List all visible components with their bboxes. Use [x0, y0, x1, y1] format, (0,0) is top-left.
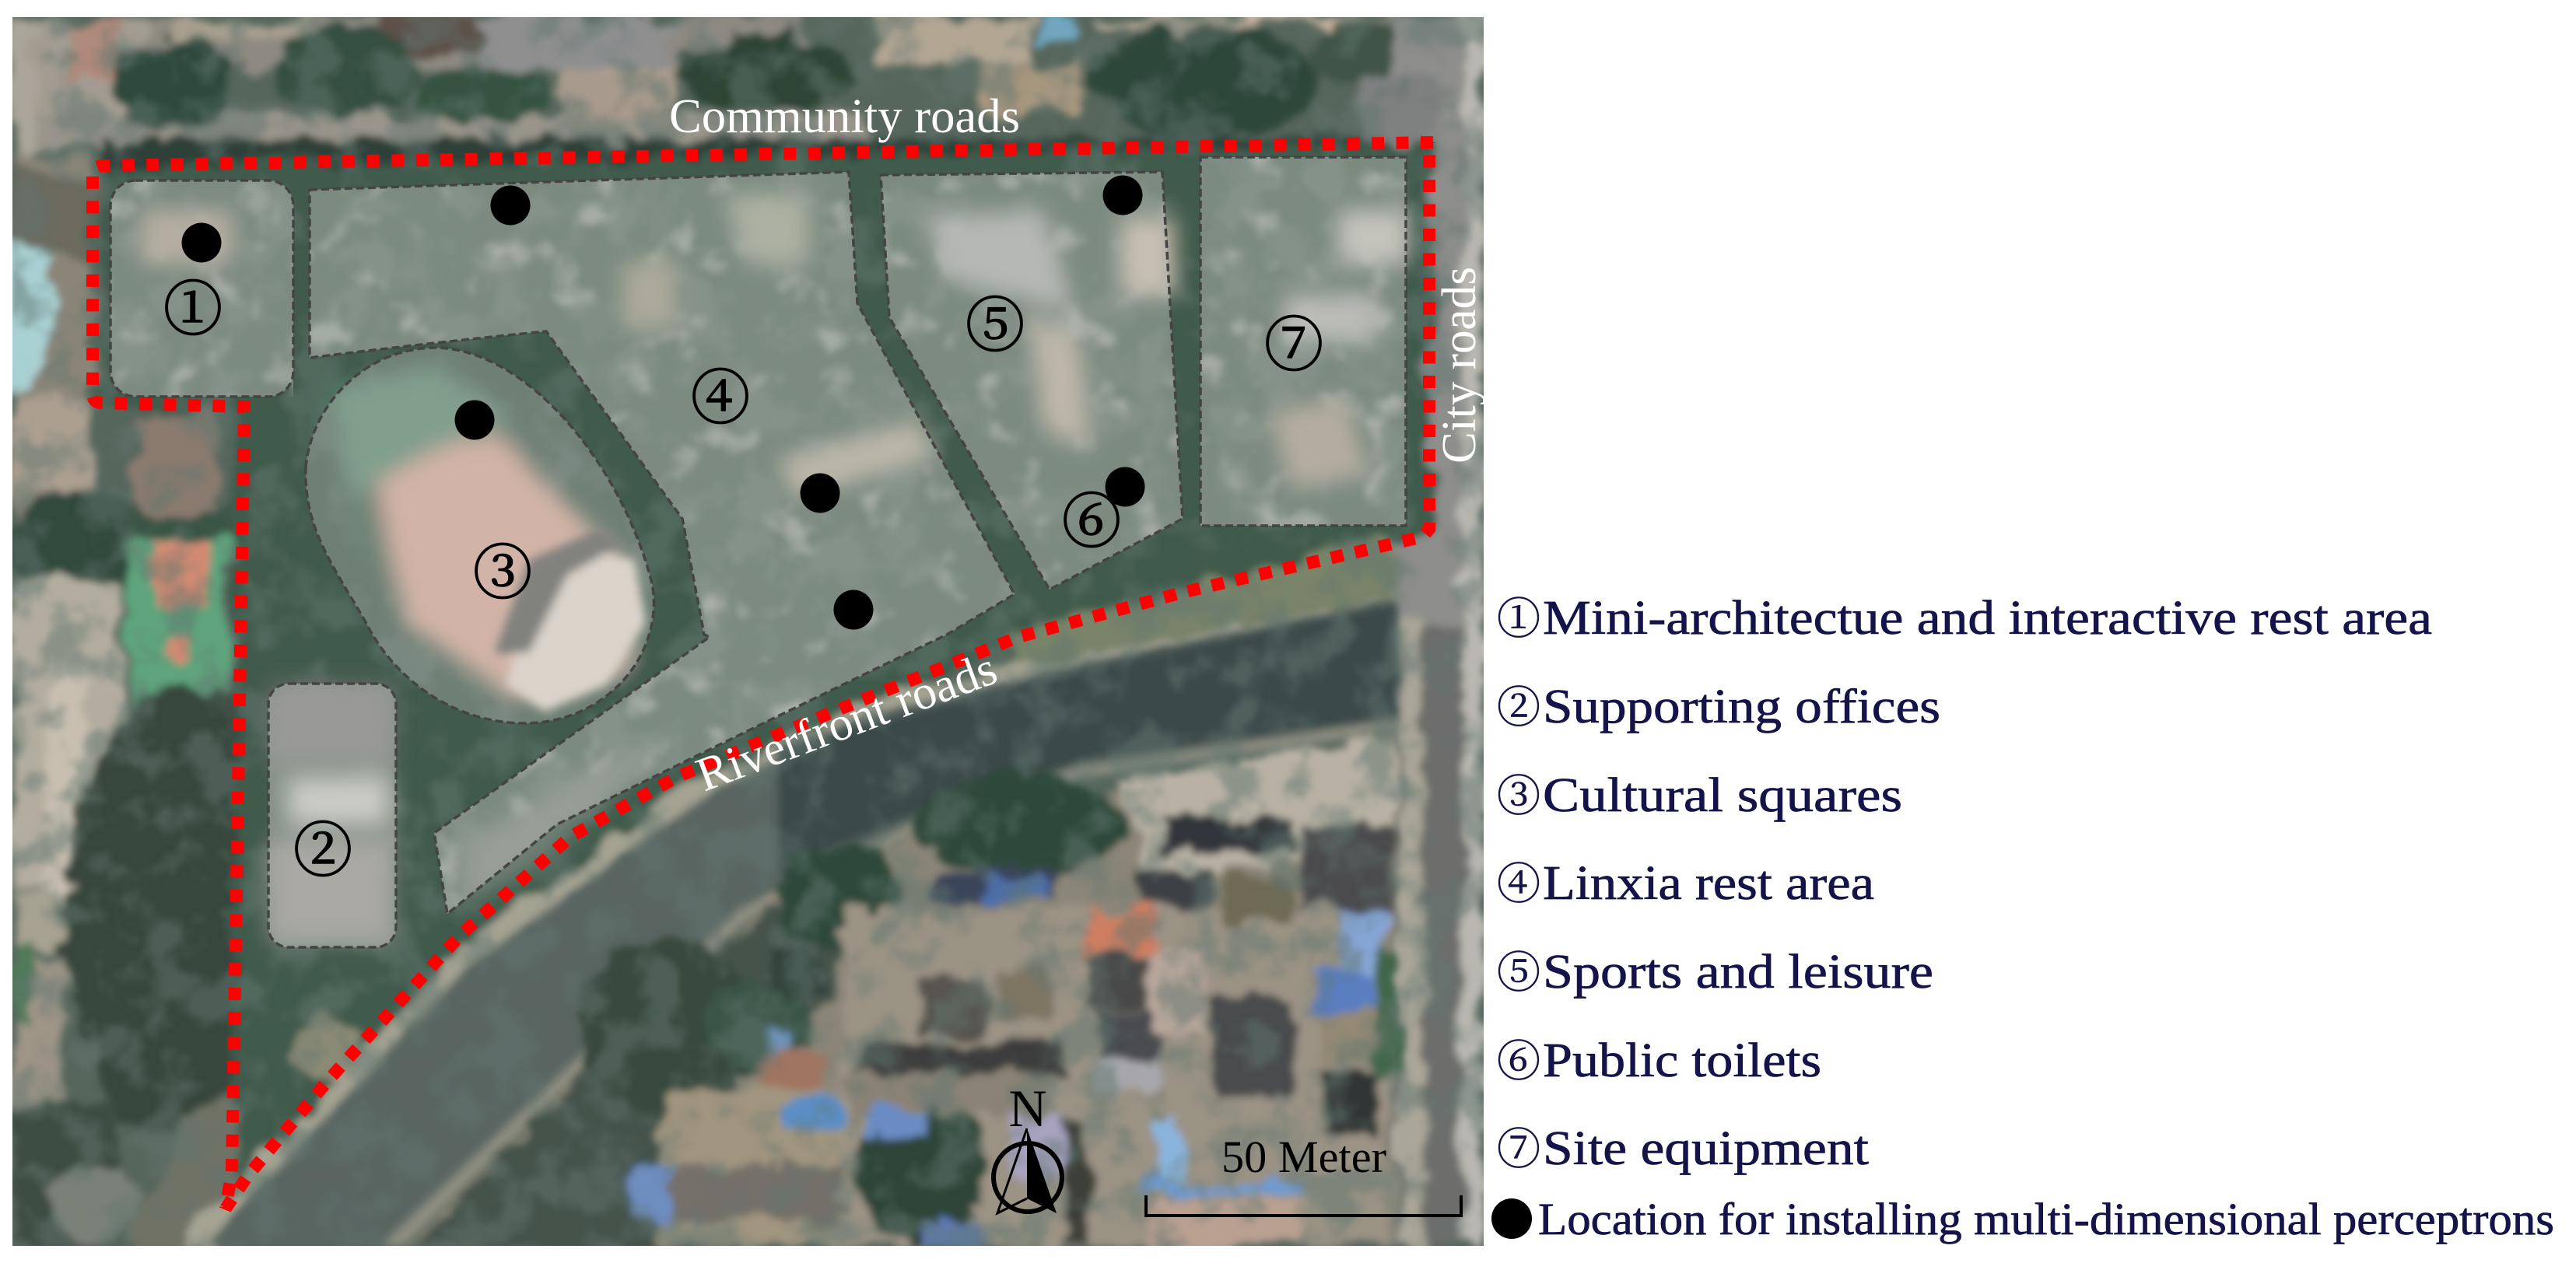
zone numbers — [163, 262, 1323, 888]
legend: ② — [1497, 673, 1540, 736]
road labels: Community roads — [669, 90, 1020, 143]
legend: ⑦ — [1497, 1115, 1540, 1177]
legend: Site equipment — [1543, 1122, 1869, 1175]
site zones — [110, 157, 1406, 947]
road labels — [669, 90, 1486, 802]
legend: Linxia rest area — [1543, 857, 1874, 910]
zone numbers: ⑦ — [1264, 298, 1323, 383]
river — [206, 599, 1397, 1246]
zone light mottling — [110, 157, 1406, 914]
legend: ① — [1497, 585, 1540, 647]
legend: Sports and leisure — [1543, 946, 1933, 999]
south bank — [405, 731, 1398, 1246]
tree canopy mottling — [12, 17, 1484, 1246]
north arrow — [994, 1079, 1062, 1213]
legend: Public toilets — [1543, 1034, 1821, 1087]
north arrow: N — [1008, 1079, 1047, 1138]
zone 5 and 6 — [881, 172, 1183, 590]
legend: Supporting offices — [1543, 680, 1940, 733]
zone 2 — [268, 684, 396, 947]
zone numbers: ⑤ — [966, 278, 1025, 363]
road labels: Riverfront roads — [689, 642, 1004, 802]
zone 1 — [110, 180, 293, 397]
zone numbers: ② — [293, 803, 352, 888]
legend: Cultural squares — [1543, 769, 1902, 822]
legend: ⑥ — [1497, 1027, 1540, 1090]
legend: Mini-architectue and interactive rest area — [1543, 592, 2432, 645]
zone numbers: ① — [163, 262, 223, 347]
legend: ④ — [1497, 850, 1540, 912]
legend: ③ — [1497, 762, 1540, 824]
zone 7 — [1200, 157, 1406, 526]
zone 4 — [310, 172, 1015, 914]
satellite map background — [0, 17, 1484, 1246]
road labels: City roads — [1433, 267, 1486, 464]
legend: ⑤ — [1497, 939, 1540, 1001]
legend — [1491, 585, 2554, 1244]
scale bar: 50 Meter — [1221, 1132, 1386, 1182]
scale bar — [1146, 1132, 1461, 1216]
zone numbers: ④ — [691, 351, 750, 436]
zone 3 — [306, 348, 654, 723]
legend: Location for installing multi-dimensional perceptrons — [1538, 1194, 2554, 1244]
perceptron location dots — [182, 176, 1145, 630]
cultural square stage — [494, 529, 646, 712]
red site boundary — [93, 142, 1433, 1209]
zone numbers: ③ — [473, 526, 532, 611]
zone numbers: ⑥ — [1062, 474, 1121, 559]
